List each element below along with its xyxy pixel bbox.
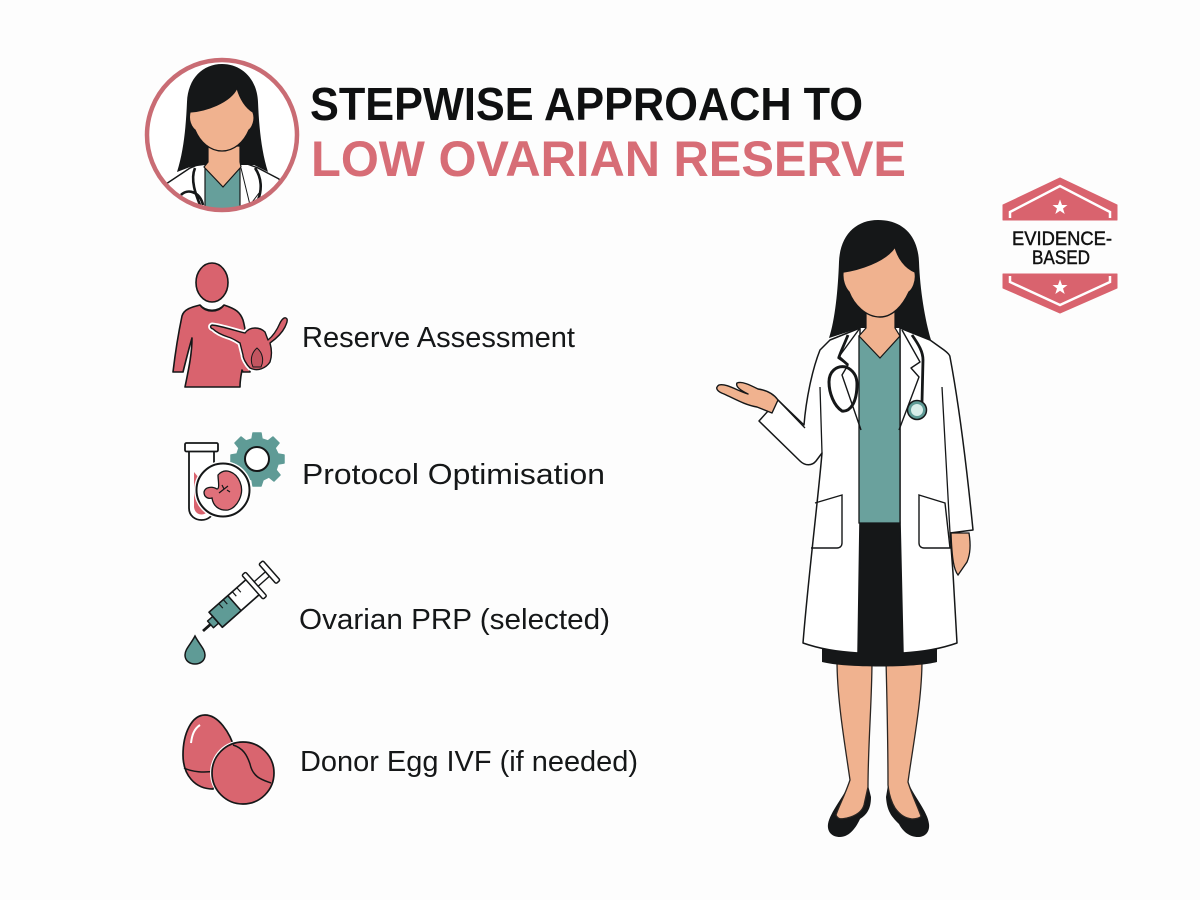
- doctor figure: [717, 220, 973, 837]
- step 1: reserve assessment: [173, 263, 575, 387]
- infographic canvas: [144, 58, 1118, 837]
- label: Ovarian PRP (selected): [299, 604, 610, 636]
- icon: test tube, embryo and gear: [185, 433, 284, 520]
- icon: woman with uterus: [173, 263, 287, 387]
- label: Donor Egg IVF (if needed): [300, 746, 638, 778]
- lapels: [838, 328, 920, 430]
- badge: evidence-based: BASED: [1032, 248, 1090, 269]
- icon: syringe and drop: [185, 558, 282, 664]
- step 2: protocol optimisation: [185, 433, 605, 520]
- legs: [836, 660, 922, 819]
- badge: evidence-based: EVIDENCE-: [1012, 229, 1112, 250]
- step 3: ovarian prp: [185, 558, 610, 664]
- badge: evidence-based: [1003, 178, 1117, 313]
- uterus: [211, 318, 287, 370]
- skirt: [822, 520, 937, 666]
- icon: eggs: [183, 715, 276, 806]
- scrubs: [859, 336, 900, 523]
- right hand: [951, 533, 970, 575]
- left hand: [717, 382, 778, 413]
- coat seams: [778, 387, 950, 533]
- label: Protocol Optimisation: [302, 459, 605, 491]
- icon: doctor avatar: [147, 60, 297, 220]
- title: [310, 78, 906, 187]
- label: Reserve Assessment: [302, 322, 575, 354]
- stethoscope: [829, 335, 926, 420]
- title line 2: LOW OVARIAN RESERVE: [311, 131, 906, 187]
- face: [843, 247, 915, 317]
- step 4: donor egg ivf: [183, 715, 638, 806]
- left pocket: [811, 495, 842, 548]
- lab coat right: [900, 328, 973, 653]
- neck: [859, 310, 900, 358]
- shoes: [828, 782, 929, 837]
- title line 1: STEPWISE APPROACH TO: [310, 78, 863, 130]
- right pocket: [919, 495, 950, 548]
- lab coat left: [759, 328, 860, 653]
- hair: [829, 220, 931, 340]
